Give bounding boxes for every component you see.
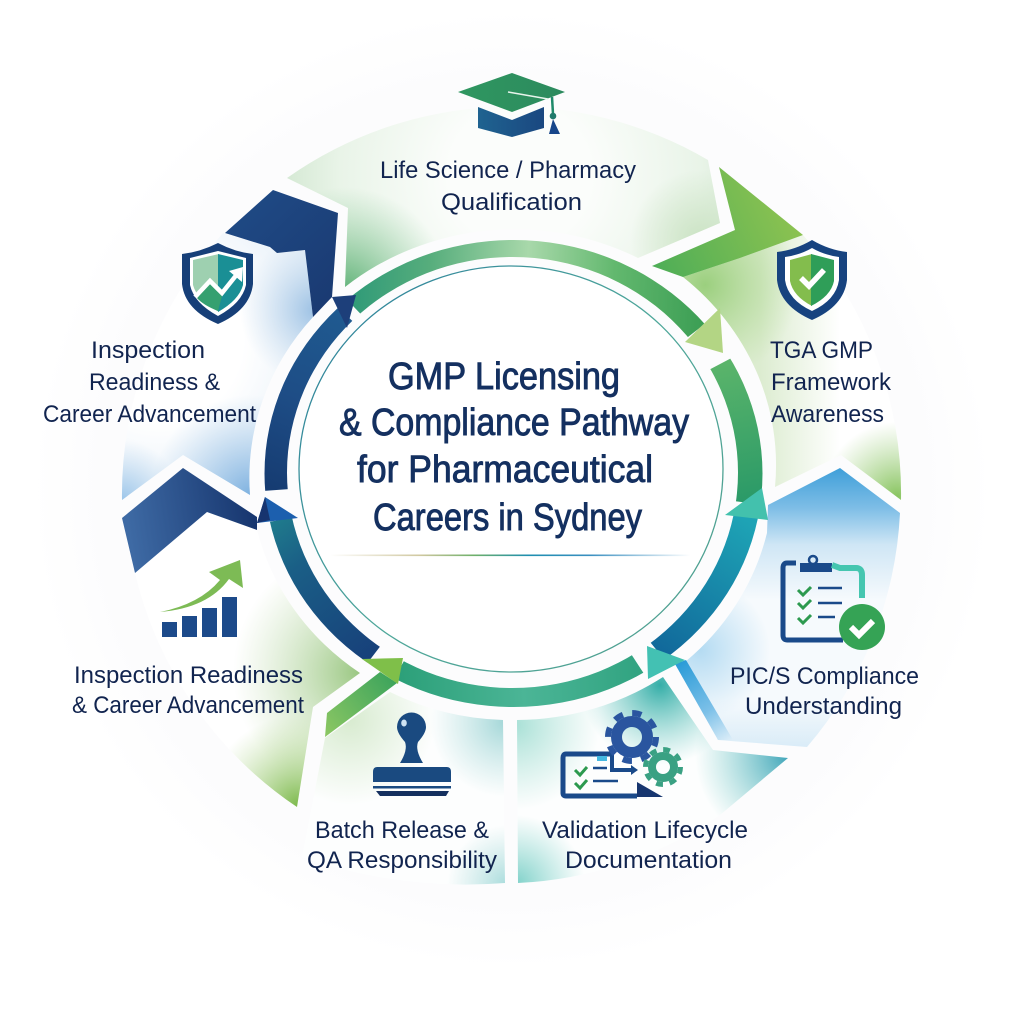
- label: TGA: [770, 337, 892, 428]
- ring: progress segments: [264, 240, 762, 707]
- icon: growth bars with arrow: [160, 560, 243, 637]
- label: TGA: Framework: [771, 369, 892, 396]
- label: inspection readiness lower: Inspection Readiness: [74, 662, 303, 689]
- icon: stamp: [373, 712, 451, 796]
- label: PIC/S: [730, 663, 919, 720]
- label: batch release: QA Responsibility: [307, 847, 497, 874]
- infographic: [44, 73, 918, 884]
- center circle: [299, 266, 723, 672]
- title: & Compliance Pathway: [339, 402, 689, 444]
- arrow: navy chevron top: [225, 190, 338, 317]
- arrow: blue streak: [675, 660, 733, 740]
- panel: TGA framework: [683, 235, 901, 500]
- label: validation: [542, 817, 748, 874]
- panel: inspection readiness upper: [122, 233, 313, 500]
- panel: batch release: [302, 692, 505, 885]
- title: GMP Licensing: [388, 356, 620, 398]
- icon: shield check: [777, 240, 847, 320]
- title divider: [330, 554, 690, 556]
- label: batch release: [307, 817, 497, 874]
- icon: clipboard: [783, 556, 885, 650]
- icon: shield with growth arrow: [182, 243, 253, 324]
- panel: career advancement lower: [135, 512, 360, 807]
- icon: gears and document: [563, 713, 680, 797]
- label: validation: Validation Lifecycle: [542, 817, 748, 844]
- label: inspection readiness lower: [72, 662, 304, 719]
- panel: validation lifecycle: [517, 677, 788, 883]
- panel: PIC/S compliance: [685, 468, 900, 747]
- label: inspection readiness upper: Career Advancement: [43, 401, 256, 428]
- label: TGA: TGA GMP: [770, 337, 873, 364]
- label: life science: Life Science / Pharmacy: [380, 157, 636, 184]
- label: batch release: Batch Release &: [315, 817, 489, 844]
- panel: life science qualification: [287, 107, 720, 287]
- label: PIC/S: Understanding: [745, 693, 902, 720]
- ring arrowheads: [257, 295, 768, 684]
- arrow: green top right: [652, 167, 803, 277]
- title: for Pharmaceutical: [357, 449, 653, 491]
- label: inspection readiness upper: Readiness &: [89, 369, 220, 396]
- label: TGA: Awareness: [771, 401, 884, 428]
- label: inspection readiness upper: Inspection: [91, 337, 205, 364]
- title: [339, 356, 689, 539]
- label: inspection readiness lower: & Career Advancement: [72, 692, 304, 719]
- label: life science: [380, 157, 636, 216]
- arrow: navy chevron left: [122, 468, 257, 573]
- label: validation: Documentation: [565, 847, 732, 874]
- title: Careers in Sydney: [373, 497, 642, 539]
- icon: graduation cap: [458, 73, 565, 137]
- label: PIC/S: PIC/S Compliance: [730, 663, 919, 690]
- label: inspection readiness upper: [43, 337, 256, 428]
- arrow: green strip: [325, 672, 397, 737]
- label: life science: Qualification: [441, 189, 582, 216]
